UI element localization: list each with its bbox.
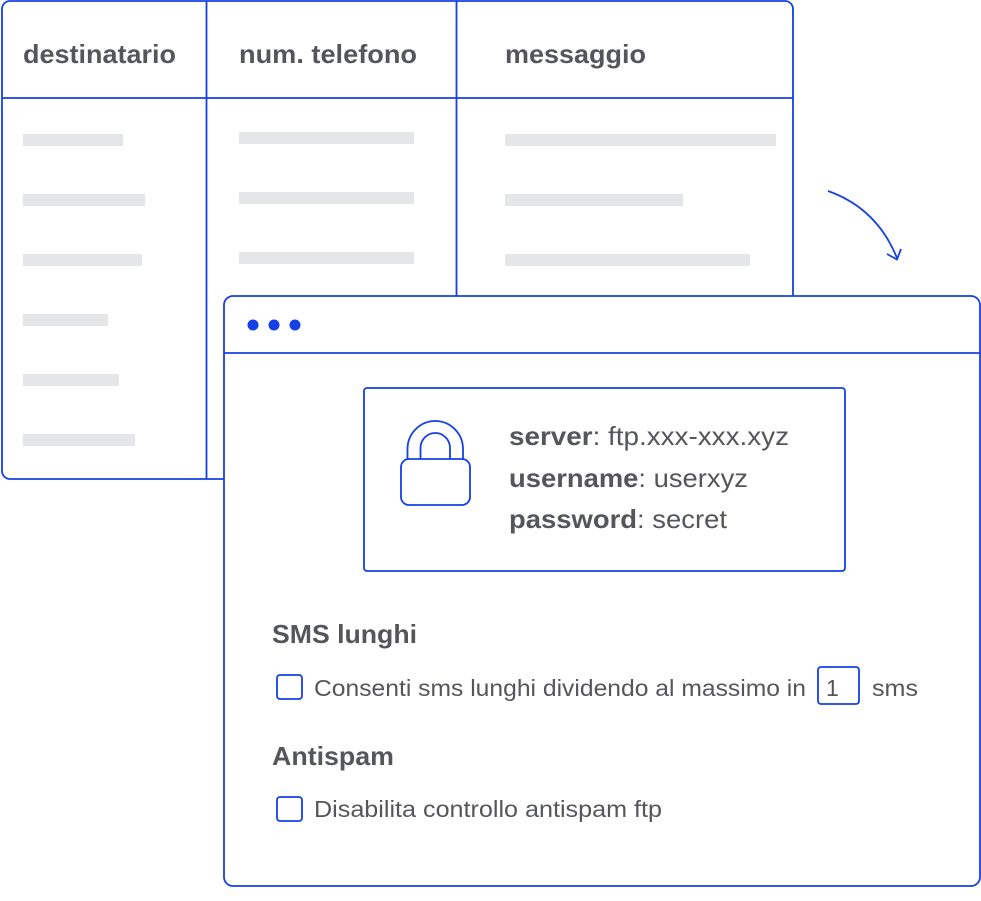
- checkbox: antispam: [277, 797, 302, 821]
- text: server: server: ftp.xxx-xxx.xyz: [509, 421, 789, 451]
- input: numero sms: 1: [826, 675, 839, 701]
- panel: data table: [2, 1, 793, 479]
- text: consenti sms lunghi: Consenti sms lunghi dividendo al massimo in: [314, 675, 806, 701]
- placeholder rows: messaggio: [505, 134, 776, 266]
- icon: padlock: [401, 421, 470, 505]
- heading: messaggio: messaggio: [505, 39, 646, 69]
- text: password: password : secret: [509, 504, 728, 534]
- text: sms: sms: [872, 675, 918, 701]
- heading: SMS lunghi: SMS lunghi: [272, 619, 417, 649]
- heading: num. telefono: num. telefono: [239, 39, 417, 69]
- text: username: username : userxyz: [509, 463, 748, 493]
- text: disabilita antispam: Disabilita controllo antispam ftp: [314, 796, 662, 822]
- window dots: [248, 320, 300, 330]
- placeholder rows: num. telefono: [239, 132, 414, 264]
- heading: Antispam: Antispam: [272, 741, 394, 771]
- panel: credentials: [364, 388, 845, 571]
- checkbox: sms lunghi: [277, 675, 302, 699]
- placeholder rows: destinatario: [23, 134, 145, 446]
- heading: destinatario: destinatario: [23, 39, 176, 69]
- input: numero sms: [818, 667, 859, 704]
- panel: settings window: [224, 296, 980, 886]
- arrow: [828, 191, 901, 260]
